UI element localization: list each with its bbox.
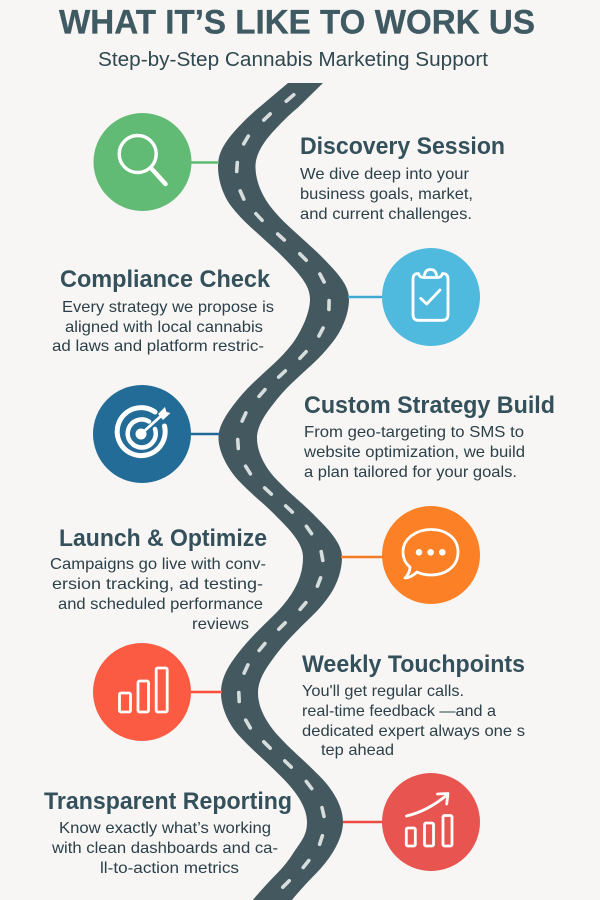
- step: Discovery Session: [300, 133, 505, 223]
- icon: speech bubble: [382, 506, 480, 604]
- winding road: [218, 83, 349, 900]
- icon: magnifying glass: [94, 113, 192, 211]
- step: Compliance Check: [52, 266, 274, 355]
- step: Custom Strategy Build: website optimization, we build: [303, 444, 525, 461]
- step: Transparent Reporting: [44, 788, 292, 877]
- connector: touchpoints: [190, 691, 222, 693]
- connector: launch: [341, 556, 383, 558]
- icon: rising bar chart: [382, 773, 480, 871]
- step: Transparent Reporting: ll-to-action metrics: [100, 860, 239, 877]
- step: Transparent Reporting: with clean dashboards and ca-: [51, 840, 278, 857]
- step: Compliance Check: aligned with local cannabis: [65, 319, 263, 336]
- step: Transparent Reporting: Know exactly what’s working: [59, 820, 271, 837]
- step: Launch & Optimize: ersion tracking, ad testing-: [52, 576, 263, 593]
- step: Weekly Touchpoints: tep ahead: [321, 742, 394, 759]
- step: Discovery Session: and current challenges.: [300, 206, 472, 223]
- connector: compliance: [348, 296, 383, 298]
- step: Discovery Session: business goals, market,: [300, 186, 473, 203]
- step: Launch & Optimize: Campaigns go live with conv-: [50, 556, 266, 573]
- title: WHAT IT’S LIKE TO WORK US: [59, 4, 535, 42]
- step: Custom Strategy Build: Custom Strategy Build: [304, 392, 555, 419]
- step: Weekly Touchpoints: You'll get regular calls.: [302, 683, 464, 700]
- connector: discovery: [190, 161, 219, 164]
- step: Weekly Touchpoints: [302, 651, 525, 759]
- step: Launch & Optimize: and scheduled performance: [58, 596, 263, 613]
- icon: target with arrow: [93, 385, 191, 483]
- icon: clipboard check: [382, 248, 480, 346]
- connector: reporting: [343, 821, 383, 823]
- step: Weekly Touchpoints: real-time feedback —and a: [302, 703, 496, 720]
- step: Weekly Touchpoints: dedicated expert always one s: [302, 723, 525, 740]
- step: Launch & Optimize: [50, 525, 267, 633]
- step: Discovery Session: We dive deep into your: [300, 166, 470, 183]
- step: Transparent Reporting: Transparent Reporting: [44, 788, 292, 815]
- step: Weekly Touchpoints: Weekly Touchpoints: [302, 651, 525, 678]
- step: Launch & Optimize: Launch & Optimize: [59, 525, 267, 552]
- step: Discovery Session: Discovery Session: [300, 133, 505, 160]
- step: Compliance Check: Compliance Check: [60, 266, 271, 293]
- step: Compliance Check: Every strategy we propose is: [62, 299, 274, 316]
- connector: strategy: [190, 433, 220, 435]
- subtitle: Step-by-Step Cannabis Marketing Support: [98, 49, 488, 71]
- icon: bar chart: [93, 643, 191, 741]
- step: Compliance Check: ad laws and platform restric-: [52, 338, 264, 355]
- step: Custom Strategy Build: a plan tailored for your goals.: [304, 464, 517, 481]
- step: Launch & Optimize: reviews: [192, 616, 249, 633]
- step: Custom Strategy Build: From geo-targeting to SMS to: [304, 424, 524, 441]
- step: Custom Strategy Build: [303, 392, 555, 481]
